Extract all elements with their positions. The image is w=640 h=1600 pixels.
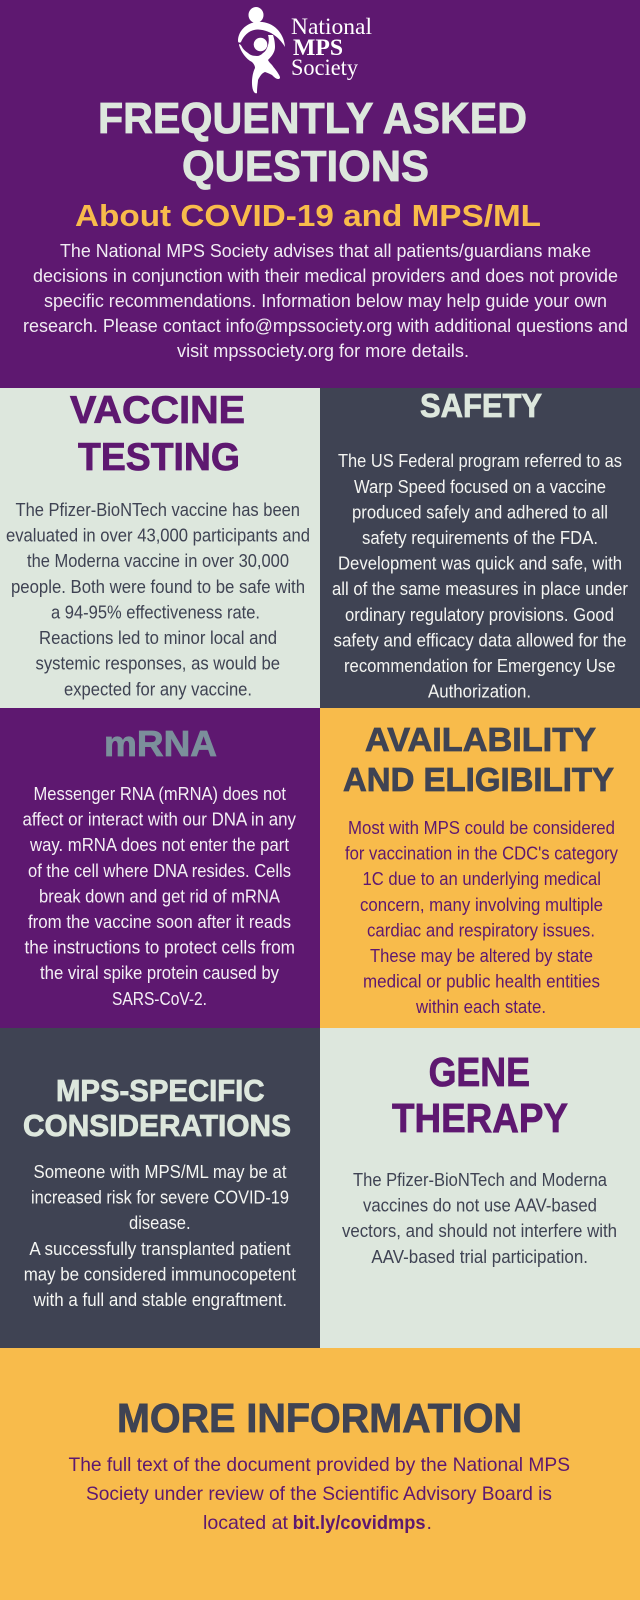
heading: mRNA: mRNA [104, 723, 217, 764]
body text: safety: safety requirements of the FDA. [362, 527, 598, 548]
body text: more information: Society under review of the Scientific Advisory Board is [86, 1483, 552, 1505]
body text: gene therapy [342, 1169, 617, 1267]
heading: safety: SAFETY [420, 388, 542, 425]
body text: mRNA: SARS-CoV-2. [112, 988, 207, 1009]
body text: availability and eligibility: medical or public health entities [363, 971, 600, 992]
body text: mRNA: break down and get rid of mRNA [39, 885, 281, 906]
intro text: specific recommendations. Information below may help guide your own [44, 290, 607, 311]
body text: safety: ordinary regulatory provisions. Good [345, 604, 614, 625]
body text: gene therapy: AAV-based trial participation. [371, 1246, 588, 1267]
intro text: decisions in conjunction with their medical providers and does not provide [33, 265, 618, 286]
body text: availability and eligibility [345, 817, 619, 1017]
body text: MPS-specific considerations: increased risk for severe COVID-19 [31, 1187, 289, 1208]
body text: vaccine testing: systemic responses, as would be [36, 653, 280, 674]
body text: more information: . [426, 1512, 432, 1534]
body text: MPS-specific considerations: may be considered immunocopetent [24, 1263, 296, 1284]
body text: availability and eligibility: 1C due to an underlying medical [362, 868, 601, 889]
logo wordmark: National [291, 14, 372, 39]
body text: MPS-specific considerations: A successfully transplanted patient [29, 1238, 291, 1259]
body text: mRNA: the instructions to protect cells from [24, 937, 295, 958]
body text: availability and eligibility: These may be altered by state [370, 945, 593, 966]
body text: vaccine testing: the Moderna vaccine in over 30,000 [27, 550, 289, 571]
body text: MPS-specific considerations: Someone with MPS/ML may be at [34, 1161, 286, 1182]
heading: more information: MORE INFORMATION [117, 1395, 522, 1441]
heading: vaccine testing: VACCINE [70, 389, 245, 432]
body text: availability and eligibility: Most with MPS could be considered [348, 817, 615, 838]
body text: gene therapy: vaccines do not use AAV-based [363, 1195, 597, 1216]
heading: availability and eligibility: AVAILABILITY [365, 722, 596, 759]
body text: more information: located at [203, 1512, 289, 1534]
body text: mRNA: Messenger RNA (mRNA) does not [34, 783, 286, 804]
panel: availability and eligibility [320, 708, 640, 1028]
body text: availability and eligibility: concern, many involving multiple [360, 894, 603, 915]
heading: MPS-specific considerations: MPS-SPECIFIC [56, 1074, 264, 1108]
body text: vaccine testing: evaluated in over 43,000 participants and [6, 525, 310, 546]
body text: gene therapy: The Pfizer-BioNTech and Moderna [353, 1169, 608, 1190]
body text: mRNA: way. mRNA does not enter the part [29, 834, 289, 855]
body text: gene therapy: vectors, and should not interfere with [342, 1220, 617, 1241]
heading: gene therapy: THERAPY [392, 1095, 568, 1141]
body text: vaccine testing: Reactions led to minor local and [39, 627, 277, 648]
heading: gene therapy [392, 1049, 568, 1141]
heading: MPS-specific considerations [23, 1074, 291, 1143]
panel: vaccine testing [0, 388, 320, 708]
body text: vaccine testing [6, 499, 310, 699]
heading: availability and eligibility: AND ELIGIBILITY [343, 762, 614, 799]
body text: mRNA: of the cell where DNA resides. Cells [28, 860, 291, 881]
body text: more information [68, 1454, 570, 1534]
body text: vaccine testing: people. Both were found to be safe with [11, 576, 305, 597]
logo wordmark: MPS [293, 35, 343, 60]
subtitle: About COVID-19 and MPS/ML [75, 198, 541, 233]
panel: more information [0, 1348, 640, 1600]
intro text [23, 240, 628, 361]
title: QUESTIONS [182, 142, 429, 191]
body text: safety: recommendation for Emergency Use [344, 655, 616, 676]
body text: MPS-specific considerations: disease. [129, 1212, 191, 1233]
body text: mRNA: the viral spike protein caused by [40, 962, 280, 983]
body text: more information: bit.ly/covidmps [293, 1512, 426, 1534]
intro text: research. Please contact info@mpssociety.org with additional questions and [23, 315, 628, 336]
logo wordmark: Society [291, 55, 358, 80]
body text: vaccine testing: expected for any vaccine. [64, 678, 252, 699]
body text: availability and eligibility: for vaccination in the CDC's category [345, 843, 619, 864]
body text: safety: Authorization. [428, 681, 531, 702]
panel: mRNA [0, 708, 320, 1028]
body text: vaccine testing: a 94-95% effectiveness rate. [51, 602, 260, 622]
body text: MPS-specific considerations [24, 1161, 296, 1310]
body text: mRNA [22, 783, 297, 1009]
body text: more information: The full text of the document provided by the National MPS [68, 1454, 570, 1476]
body text: availability and eligibility: cardiac and respiratory issues. [367, 919, 595, 940]
heading: availability and eligibility [343, 722, 614, 799]
heading: MPS-specific considerations: CONSIDERATIONS [23, 1109, 291, 1143]
body text: vaccine testing: The Pfizer-BioNTech vaccine has been [16, 499, 300, 520]
body text: safety [332, 450, 628, 702]
panel: safety [320, 388, 640, 708]
heading: gene therapy: GENE [429, 1049, 530, 1095]
panel: header [0, 0, 640, 388]
body text: safety: Warp Speed focused on a vaccine [354, 476, 606, 497]
panel: gene therapy [320, 1028, 640, 1348]
intro text: visit mpssociety.org for more details. [177, 340, 469, 361]
logo: National MPS Society [238, 7, 372, 93]
heading: vaccine testing [70, 389, 245, 479]
body text: mRNA: affect or interact with our DNA in any [22, 809, 297, 830]
body text: availability and eligibility: within each state. [415, 996, 546, 1017]
panel: MPS-specific considerations [0, 1028, 320, 1348]
heading: vaccine testing: TESTING [78, 436, 240, 479]
intro text: The National MPS Society advises that all patients/guardians make [60, 240, 591, 261]
icon: adult and child figure [238, 7, 285, 93]
logo wordmark [291, 14, 372, 80]
title [98, 94, 527, 191]
body text: safety: produced safely and adhered to all [352, 501, 608, 522]
body text: mRNA: from the vaccine soon after it reads [28, 911, 291, 932]
body text: MPS-specific considerations: with a full and stable engraftment. [33, 1289, 287, 1310]
title: FREQUENTLY ASKED [98, 94, 527, 143]
